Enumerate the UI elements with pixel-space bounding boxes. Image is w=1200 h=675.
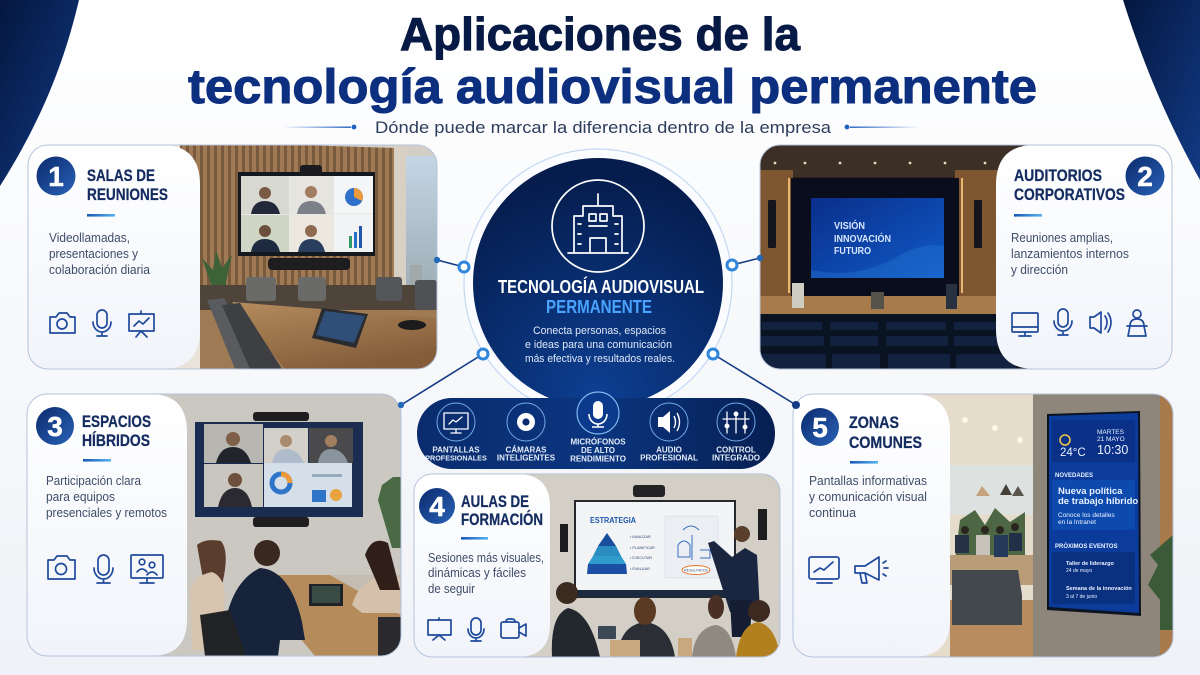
hub description: Conecta personas, espacios [533, 325, 666, 337]
icon: screen [437, 403, 475, 441]
title: tecnología audiovisual permanente [188, 61, 1037, 114]
text card [27, 394, 187, 656]
signage text: 3 al 7 de junio [1066, 594, 1097, 600]
number badge 5 [801, 408, 839, 446]
accent rule [83, 459, 111, 462]
slide bullets: • PLANIFICAR [630, 546, 655, 550]
signage text: 21 MAYO [1097, 436, 1125, 443]
slide text: ESTRATEGIA [590, 516, 636, 525]
item: microfonos [570, 392, 626, 464]
heading: AULAS DE [461, 492, 529, 511]
icon: microphone [94, 555, 113, 583]
number badge 1: 1 [48, 161, 64, 192]
label: PROFESIONALES [425, 454, 487, 462]
description: y dirección [1011, 263, 1068, 277]
panel 4: aulas de formacion [414, 474, 780, 657]
photo: hybrid room [158, 394, 400, 656]
number badge 4: 4 [429, 491, 445, 522]
signage text: de trabajo híbrido [1058, 496, 1138, 507]
label: INTELIGENTES [497, 454, 556, 462]
heading: AUDITORIOS [1014, 166, 1102, 185]
label: PROFESIONAL [640, 454, 698, 462]
icon: camera [50, 313, 75, 333]
item: control [712, 403, 760, 462]
label: CÁMARAS [506, 446, 547, 454]
icon: microphone [93, 310, 111, 336]
slide bullets: • ANALIZAR [630, 535, 651, 539]
description: dinámicas y fáciles [428, 566, 526, 580]
number badge 3 [36, 407, 74, 445]
item: audio [640, 403, 698, 462]
text card [793, 394, 950, 657]
signage text: PRÓXIMOS EVENTOS [1055, 542, 1118, 550]
accent rule [850, 461, 878, 464]
description: Pantallas informativas [809, 474, 927, 488]
label: MICRÓFONOS [570, 438, 626, 446]
screen text: VISIÓN [834, 219, 865, 232]
panel outline [760, 145, 1172, 369]
label: INTEGRADO [712, 454, 760, 462]
icon: camera [48, 556, 75, 579]
photo: common area with signage [920, 394, 1172, 656]
panel outline [793, 394, 1173, 657]
label: RENDIMIENTO [570, 454, 626, 464]
subtitle: Dónde puede marcar la diferencia dentro de la empresa [375, 119, 832, 137]
connector: auditoriums [727, 255, 763, 270]
icon: video meeting [131, 555, 163, 583]
signage text: Conoce los detalles [1058, 512, 1115, 519]
signage text [1055, 429, 1138, 600]
signage text: NOVEDADES [1055, 473, 1093, 479]
hub description: más efectiva y resultados reales. [525, 353, 675, 365]
label: CONTROL [716, 446, 756, 454]
description: Videollamadas, [49, 231, 130, 245]
panel 5: zonas comunes [793, 394, 1173, 657]
icon: speaker at podium [1127, 310, 1147, 336]
connector: common areas [708, 349, 800, 409]
connector: hybrid spaces [398, 349, 488, 408]
icon: microphone [468, 618, 484, 641]
description: presentaciones y [49, 247, 139, 261]
text card [414, 474, 550, 657]
icon: loudspeaker [650, 403, 688, 441]
number badge 2: 2 [1137, 161, 1153, 192]
heading: COMUNES [849, 433, 922, 452]
description: presenciales y remotos [46, 506, 167, 520]
icon: mixer sliders [717, 403, 755, 441]
icon: microphone [1054, 309, 1072, 335]
heading: HÍBRIDOS [82, 431, 150, 450]
screen text: FUTURO [834, 245, 871, 257]
label: AUDIO [656, 446, 682, 454]
icon: board [428, 618, 451, 640]
panel 1: salas de reuniones [28, 145, 437, 369]
heading: SALAS DE [87, 166, 155, 185]
number badge 5: 5 [812, 412, 828, 443]
icon: monitor chart [809, 557, 839, 583]
item: camaras [497, 403, 556, 462]
slide bullets: • EJECUTAR [630, 556, 652, 560]
signage text: Nueva política [1058, 486, 1123, 497]
description: de seguir [428, 582, 475, 596]
number badge 2 [1126, 156, 1164, 196]
item: pantallas [425, 403, 487, 462]
panel 2: auditorios corporativos [760, 145, 1172, 369]
description: lanzamientos internos [1011, 247, 1129, 261]
description: colaboración diaria [49, 263, 150, 277]
label: DE ALTO [581, 446, 615, 455]
signage text: 24 de mayo [1066, 568, 1092, 574]
photo: auditorium [760, 146, 1028, 368]
panel outline [414, 474, 780, 657]
icon: megaphone [855, 557, 888, 583]
corner decoration: top right [1123, 0, 1200, 180]
description: Reuniones amplias, [1011, 231, 1113, 245]
panel outline [28, 145, 437, 369]
accent rule [87, 214, 115, 217]
title: Aplicaciones de la [400, 8, 800, 60]
title [188, 8, 1037, 114]
device strip [417, 392, 775, 469]
icon: monitor [1012, 313, 1038, 336]
signage text: Taller de liderazgo [1066, 561, 1115, 567]
description: para equipos [46, 490, 115, 504]
heading: CORPORATIVOS [1014, 185, 1125, 204]
accent rule [461, 537, 488, 540]
icon: video camera [501, 619, 526, 638]
heading: REUNIONES [87, 185, 168, 204]
corner decoration: top left [0, 0, 79, 186]
central hub [398, 149, 800, 417]
signage text: MARTES [1097, 429, 1125, 436]
heading: ESPACIOS [82, 412, 151, 431]
slide bullets: • EVALUAR [630, 567, 650, 571]
description: y comunicación visual [809, 490, 927, 504]
description: Sesiones más visuales, [428, 551, 544, 565]
label: PANTALLAS [432, 446, 480, 454]
core circle [473, 158, 723, 408]
text card [996, 145, 1172, 369]
signage text: 24°C [1060, 447, 1086, 459]
icon: studio microphone [577, 392, 619, 434]
signage text: en la Intranet [1058, 519, 1096, 526]
signage text: 10:30 [1097, 443, 1128, 457]
icon: speaker [1090, 312, 1111, 333]
outer ring [464, 149, 732, 417]
hub description: e ideas para una comunicación [525, 339, 672, 351]
heading: FORMACIÓN [461, 510, 543, 529]
hub title: PERMANENTE [546, 297, 652, 317]
hub title: TECNOLOGÍA AUDIOVISUAL [498, 276, 704, 297]
subtitle [283, 119, 920, 137]
number badge 4 [419, 488, 455, 524]
panel 3: espacios hibridos [27, 394, 401, 656]
icon: building [552, 180, 644, 272]
panel outline [27, 394, 401, 656]
whiteboard label: RESULTADOS [684, 568, 709, 572]
text card [28, 145, 200, 369]
description: Participación clara [46, 474, 141, 488]
screen text: INNOVACIÓN [834, 232, 891, 245]
icon: smart camera [507, 403, 545, 441]
photo: meeting room [171, 146, 436, 368]
number badge 3: 3 [47, 411, 63, 442]
photo: training room [525, 474, 780, 656]
signage text: Semana de la innovación [1066, 586, 1132, 592]
connector: meeting rooms [434, 257, 469, 272]
heading: ZONAS [849, 413, 899, 432]
number badge 1 [36, 156, 76, 196]
description: continua [809, 506, 856, 520]
accent rule [1014, 214, 1042, 217]
icon: presentation [129, 311, 154, 337]
